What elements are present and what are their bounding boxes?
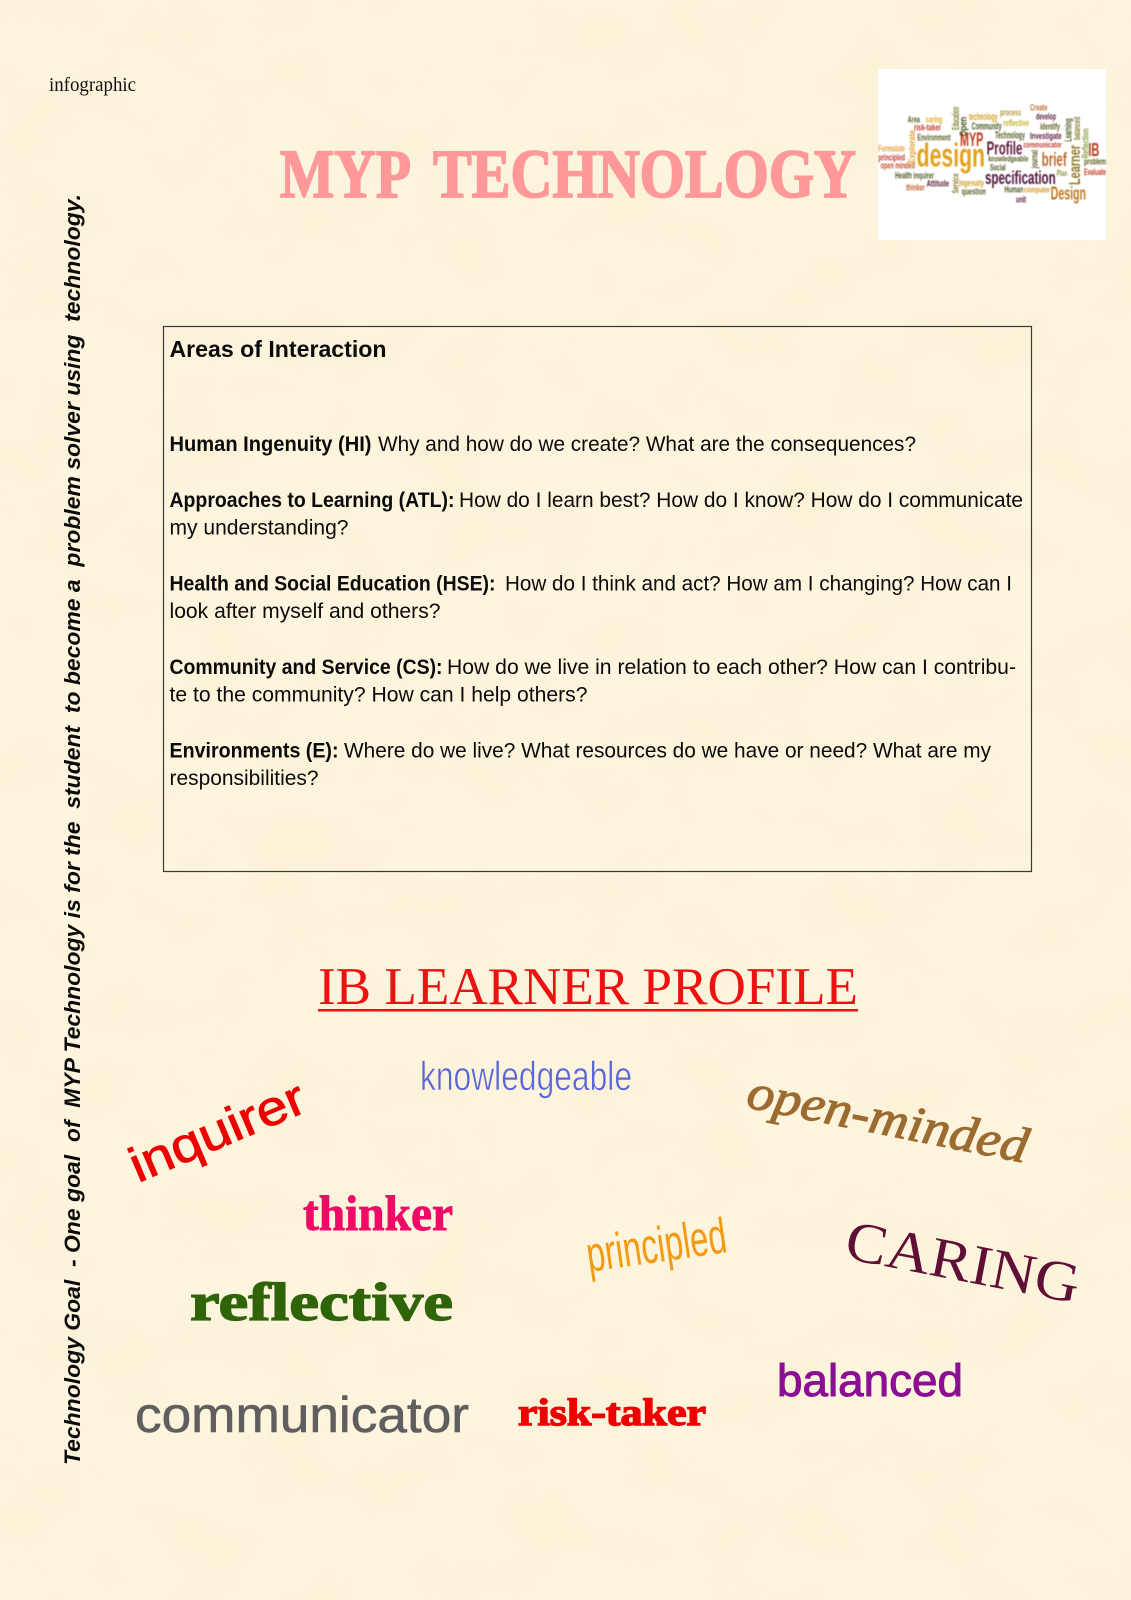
item: approaches to learning: my understanding? bbox=[170, 516, 349, 540]
word cloud image: MYP bbox=[960, 130, 983, 151]
word cloud image: technology bbox=[969, 112, 998, 123]
word cloud image: computer bbox=[1024, 185, 1051, 195]
item: human ingenuity: Human Ingenuity (HI) bbox=[170, 432, 372, 456]
item: environments: Where do we live? What resources do we have or need? What are my bbox=[344, 738, 991, 762]
item: community and service bbox=[170, 655, 1016, 706]
panel heading: Areas of Interaction bbox=[170, 336, 386, 362]
item: health and social education: How do I think and act? How am I changing? How can I bbox=[505, 572, 1012, 596]
word cloud image: develop bbox=[1036, 111, 1056, 121]
word cloud image: Community bbox=[972, 121, 1002, 132]
word cloud image: open minded bbox=[881, 160, 915, 170]
word cloud image: Open bbox=[959, 117, 970, 137]
panel: areas of interaction bbox=[164, 326, 1032, 872]
item: environments: Environments (E): bbox=[170, 738, 338, 762]
word cloud image: caring bbox=[926, 115, 942, 125]
word cloud image: Profile bbox=[987, 138, 1022, 158]
word cloud image: Create bbox=[1030, 103, 1047, 113]
word: principled: principled bbox=[583, 1207, 730, 1283]
label: infographic: infographic bbox=[49, 74, 136, 96]
word: thinker: thinker bbox=[303, 1185, 453, 1241]
vertical technology goal text: Technology Goal - One goal of MYP Technology is for the student to become a problem solver using technology. bbox=[60, 194, 85, 1465]
word: communicator: communicator bbox=[135, 1387, 469, 1443]
word cloud image: Human bbox=[1004, 184, 1023, 194]
word: knowledgeable: knowledgeable bbox=[420, 1053, 632, 1099]
item: environments bbox=[170, 738, 991, 790]
item: approaches to learning: Approaches to Learning (ATL): bbox=[170, 488, 454, 512]
word cloud image: principled bbox=[878, 153, 905, 163]
word cloud image: Attitude bbox=[927, 179, 949, 189]
word cloud image: communicator bbox=[1023, 141, 1062, 150]
item: approaches to learning bbox=[170, 488, 1023, 540]
word cloud image bbox=[878, 69, 1106, 240]
word cloud image: thinker bbox=[906, 183, 925, 193]
item: environments: responsibilities? bbox=[170, 766, 319, 790]
item: community and service: Community and Service (CS): bbox=[170, 655, 442, 679]
item: health and social education: Health and Social Education (HSE): bbox=[170, 572, 496, 596]
word: balanced: balanced bbox=[777, 1355, 963, 1406]
word cloud image: Service bbox=[950, 173, 960, 193]
word: reflective: reflective bbox=[190, 1272, 453, 1332]
word cloud image: Area bbox=[908, 115, 921, 125]
word cloud image: Explorate bbox=[907, 130, 917, 163]
word cloud image: Plan bbox=[1057, 168, 1067, 178]
word cloud image: Reflection bbox=[1080, 128, 1090, 158]
word cloud image: Technology bbox=[995, 131, 1025, 142]
word cloud image: Environment bbox=[917, 133, 951, 143]
item: health and social education: look after myself and others? bbox=[170, 599, 441, 623]
word cloud image: risk-taker bbox=[914, 123, 941, 133]
word cloud image: Investigate bbox=[1030, 131, 1062, 141]
word cloud image: identify bbox=[1040, 121, 1060, 131]
word cloud image: reflective bbox=[1003, 118, 1029, 128]
title: MYP Technology: MYP bbox=[280, 136, 411, 212]
word: caring: CARING bbox=[841, 1209, 1085, 1316]
word cloud image: unit bbox=[1016, 194, 1026, 204]
word cloud image: Social bbox=[990, 163, 1006, 173]
item: health and social education bbox=[170, 572, 1012, 623]
word cloud image: Learner bbox=[1067, 145, 1084, 185]
word cloud image: question bbox=[962, 186, 986, 196]
item: community and service: te to the community? How can I help others? bbox=[170, 682, 588, 706]
word cloud image: journal bbox=[1030, 150, 1040, 169]
word cloud image: Ingenuity bbox=[959, 178, 984, 188]
word: risk-taker: risk-taker bbox=[518, 1392, 706, 1434]
heading: IB learner profile: IB LEARNER PROFILE bbox=[318, 958, 858, 1016]
word cloud image: Health inquirer bbox=[895, 171, 934, 181]
word: open-minded: open-minded bbox=[743, 1063, 1034, 1174]
word: inquirer: inquirer bbox=[121, 1071, 314, 1193]
word cloud image: brief bbox=[1042, 150, 1067, 171]
word cloud image: process bbox=[1000, 108, 1021, 118]
title: MYP Technology bbox=[280, 136, 856, 212]
word cloud image: specification bbox=[985, 168, 1056, 188]
item: human ingenuity: Why and how do we create? What are the consequences? bbox=[378, 432, 916, 456]
item: community and service: How do we live in relation to each other? How can I contribu- bbox=[447, 655, 1016, 679]
word cloud image: Formulate bbox=[878, 144, 905, 154]
word cloud image: knowledgeable bbox=[988, 155, 1029, 164]
word cloud image: design bbox=[917, 138, 985, 175]
item: approaches to learning: How do I learn best? How do I know? How do I communicate bbox=[459, 488, 1023, 512]
title: MYP Technology: TECHNOLOGY bbox=[433, 136, 856, 212]
